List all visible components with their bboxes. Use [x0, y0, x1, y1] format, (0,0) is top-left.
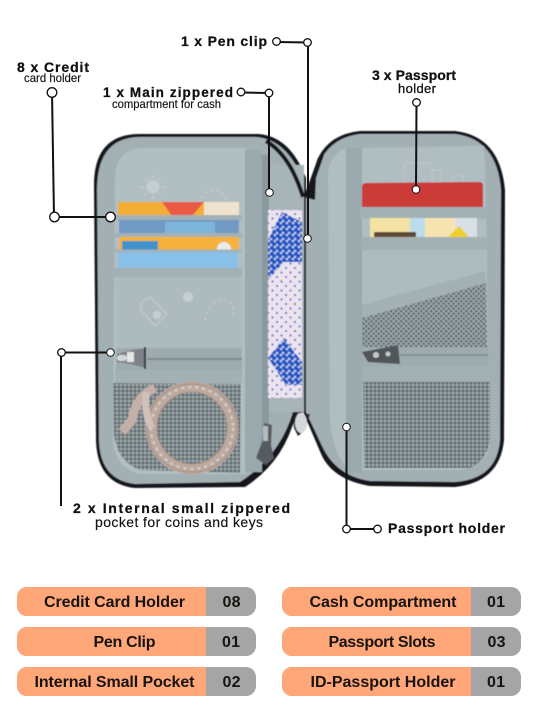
spec row: pen clip: Pen Clip [94, 634, 156, 651]
panel: left wallet half [94, 134, 306, 488]
spec row: pen clip [17, 627, 256, 656]
fabric print: sun [141, 175, 230, 210]
lower fabric pocket [117, 277, 242, 348]
label text: 2 x Internal small zippered [73, 500, 290, 516]
label text: Passport holder [388, 520, 506, 536]
spec row: internal small pocket [17, 667, 256, 696]
black zipper wedge at the top of the hinge [266, 141, 324, 200]
fabric print: mug [404, 163, 464, 187]
spec row: cash compartment: 01 [487, 594, 505, 611]
zip band with puller [116, 347, 242, 370]
spec row: cash compartment [282, 587, 521, 616]
label text: pocket for coins and keys [95, 514, 263, 530]
upper mesh pocket [362, 282, 487, 350]
callout: pen clip [181, 33, 311, 242]
spec row: credit card holder: Credit Card Holder [44, 594, 185, 611]
label text [73, 500, 290, 530]
passport: red [362, 182, 483, 207]
callout: passport holder [343, 423, 506, 536]
spec row: passport slots: 03 [488, 634, 506, 651]
spec row: credit card holder [17, 587, 256, 616]
spec row: internal small pocket: Internal Small Pocket [34, 674, 195, 691]
spec row: credit card holder: 08 [222, 594, 241, 611]
label text: 1 x Pen clip [181, 33, 267, 49]
card holder: four cards [114, 202, 242, 277]
spec row: passport slots [282, 627, 521, 656]
label text [17, 59, 89, 85]
spec row: id-passport holder: ID-Passport Holder [310, 674, 456, 691]
callout: internal small zippered pocket [58, 349, 290, 530]
label text [103, 85, 233, 111]
vertical seam band [245, 150, 262, 472]
spec row: internal small pocket: 02 [222, 674, 241, 691]
spec row: pen clip: 01 [222, 634, 240, 651]
diagonal pocket band [362, 271, 486, 318]
label text: compartment for cash [112, 97, 221, 111]
spec row: id-passport holder [282, 667, 521, 696]
label text: card holder [24, 71, 81, 85]
callout: credit card holder [17, 59, 115, 222]
spec row: passport slots: Passport Slots [328, 634, 436, 651]
label text [372, 67, 456, 96]
spec row: id-passport holder: 01 [487, 674, 505, 691]
banknote paper at the centre [268, 210, 302, 398]
label text: 8 x Credit [17, 59, 89, 75]
spec row: cash compartment: Cash Compartment [310, 594, 457, 611]
lower mesh pocket [363, 382, 490, 468]
label text: holder [398, 81, 437, 96]
label text: 1 x Main zippered [103, 85, 233, 100]
mesh pocket with coiled cable [113, 383, 241, 473]
panel: right wallet half [303, 131, 505, 487]
label text: 3 x Passport [372, 67, 456, 83]
zip pull between halves [293, 413, 310, 436]
passport: printed card [370, 218, 477, 238]
wallet: open travel organiser [94, 131, 505, 488]
zip band with puller [362, 345, 488, 367]
callout: main zippered compartment [103, 85, 273, 196]
main zip puller [256, 423, 274, 465]
callout: passport slots [372, 67, 456, 193]
